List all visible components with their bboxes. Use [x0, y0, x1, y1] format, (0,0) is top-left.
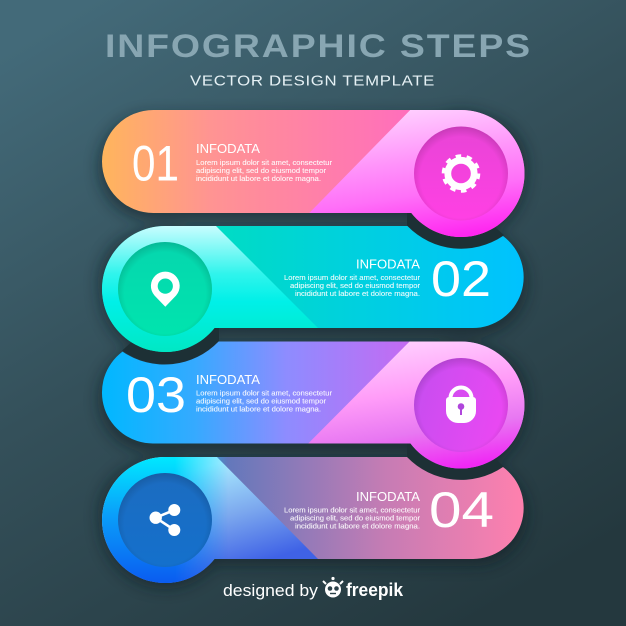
icon: padlock [446, 388, 476, 423]
footer credit: freepik [346, 580, 404, 600]
step 1 card [102, 110, 524, 237]
step 1 text: Lorem ipsum dolor sit amet, consectetur [196, 158, 333, 167]
step 1 icon disc [414, 126, 508, 220]
footer credit [223, 577, 404, 600]
step 3 text: INFODATA [196, 373, 261, 387]
step 4 text [284, 490, 421, 531]
step 4 text: Lorem ipsum dolor sit amet, consectetur [284, 506, 421, 515]
step 2 text: adipiscing elit, sed do eiusmod tempor [290, 281, 421, 290]
step 4 card [102, 457, 524, 583]
step 1 text [196, 142, 333, 183]
title: INFOGRAPHIC STEPS [105, 28, 532, 64]
step 3 number: 03 [126, 367, 186, 423]
step 2 band [102, 226, 524, 352]
step 1 number: 01 [132, 136, 179, 192]
icon: share [150, 504, 180, 536]
notch shadows [90, 98, 536, 480]
step 1 text: INFODATA [196, 142, 261, 156]
step 2 text: INFODATA [356, 258, 421, 272]
step 3 text: incididunt ut labore et dolore magna. [196, 405, 321, 414]
step 1 text: incididunt ut labore et dolore magna. [196, 174, 321, 183]
step 2 text [284, 258, 421, 298]
step 2 number: 02 [431, 251, 491, 307]
step 3 text: Lorem ipsum dolor sit amet, consectetur [196, 389, 333, 398]
step 4 icon disc [118, 473, 212, 567]
step 3 band [102, 342, 524, 468]
step 3 text [196, 373, 333, 414]
step 4 text: INFODATA [356, 490, 421, 504]
step 4 number: 04 [429, 482, 494, 538]
icon: map pin [151, 272, 180, 307]
step 1 text: adipiscing elit, sed do eiusmod tempor [196, 166, 327, 175]
step 4 band [102, 457, 524, 583]
step 2 icon disc [118, 242, 212, 336]
step 3 text: adipiscing elit, sed do eiusmod tempor [196, 397, 327, 406]
step 2 text: incididunt ut labore et dolore magna. [295, 289, 420, 298]
step 1 band [102, 110, 524, 237]
step 2 text: Lorem ipsum dolor sit amet, consectetur [284, 273, 421, 282]
step 3 card [102, 342, 524, 468]
icon: gear [444, 156, 478, 191]
step 2 card [102, 226, 524, 352]
step 4 text: adipiscing elit, sed do eiusmod tempor [290, 514, 421, 523]
step 4 text: incididunt ut labore et dolore magna. [295, 522, 420, 531]
icon: freepik mascot [323, 577, 343, 598]
footer credit: designed by [223, 581, 319, 600]
subtitle: VECTOR DESIGN TEMPLATE [190, 72, 435, 90]
soft card shadows [98, 110, 528, 589]
step 3 icon disc [414, 358, 508, 452]
